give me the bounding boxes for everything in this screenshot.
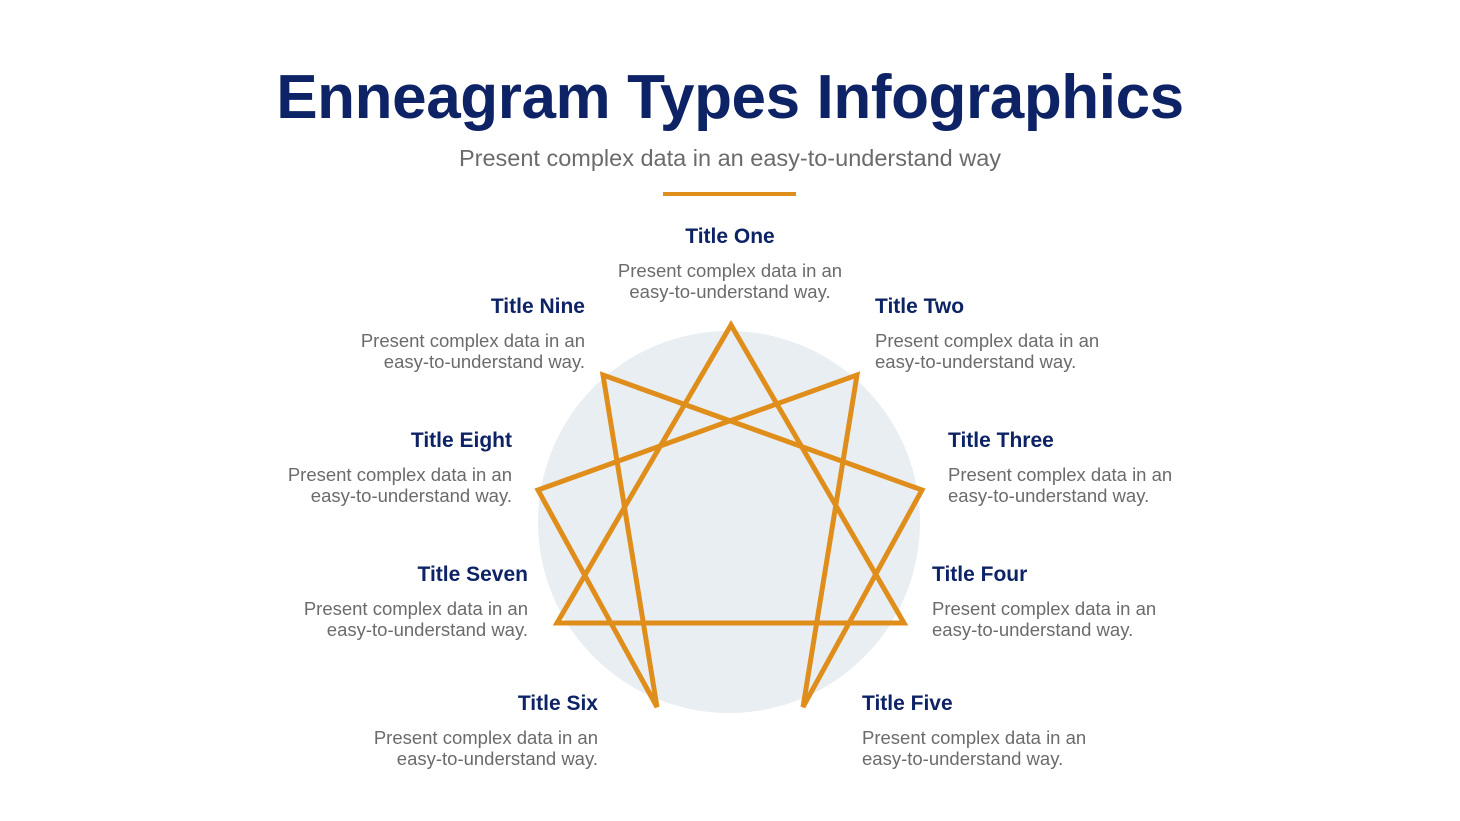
item two: Present complex data in an <box>875 330 1099 351</box>
item seven: easy-to-understand way. <box>327 618 528 640</box>
item two: easy-to-understand way. <box>875 350 1076 372</box>
item five: Title Five <box>862 692 953 715</box>
item three: easy-to-understand way. <box>948 484 1149 506</box>
item five: easy-to-understand way. <box>862 748 1063 768</box>
item nine: Present complex data in an <box>361 330 585 351</box>
item seven <box>304 563 528 640</box>
item six: easy-to-understand way. <box>397 748 598 768</box>
subtitle: Present complex data in an easy-to-understand way <box>459 145 1001 171</box>
item one <box>618 225 842 302</box>
item nine: Title Nine <box>491 295 585 318</box>
item two <box>875 295 1099 372</box>
title: Enneagram Types Infographics <box>276 63 1184 132</box>
item four: Title Four <box>932 563 1027 586</box>
item four: easy-to-understand way. <box>932 618 1133 640</box>
item four <box>932 563 1156 640</box>
item one: easy-to-understand way. <box>629 280 831 302</box>
item six: Title Six <box>518 692 598 715</box>
item one: Present complex data in an <box>618 260 842 281</box>
item six <box>374 692 598 769</box>
item eight <box>288 429 512 506</box>
item two: Title Two <box>875 295 964 318</box>
item six: Present complex data in an <box>374 727 598 748</box>
item eight: Present complex data in an <box>288 464 512 485</box>
item three: Present complex data in an <box>948 464 1172 485</box>
item seven: Present complex data in an <box>304 598 528 619</box>
item one: Title One <box>685 225 775 248</box>
item five: Present complex data in an <box>862 727 1086 748</box>
item nine <box>361 295 585 372</box>
divider accent <box>663 192 796 196</box>
item five <box>862 692 1086 769</box>
item four: Present complex data in an <box>932 598 1156 619</box>
item three <box>948 429 1172 506</box>
item seven: Title Seven <box>418 563 528 586</box>
item eight: Title Eight <box>411 429 512 452</box>
item eight: easy-to-understand way. <box>311 484 512 506</box>
item nine: easy-to-understand way. <box>384 350 585 372</box>
item three: Title Three <box>948 429 1054 452</box>
